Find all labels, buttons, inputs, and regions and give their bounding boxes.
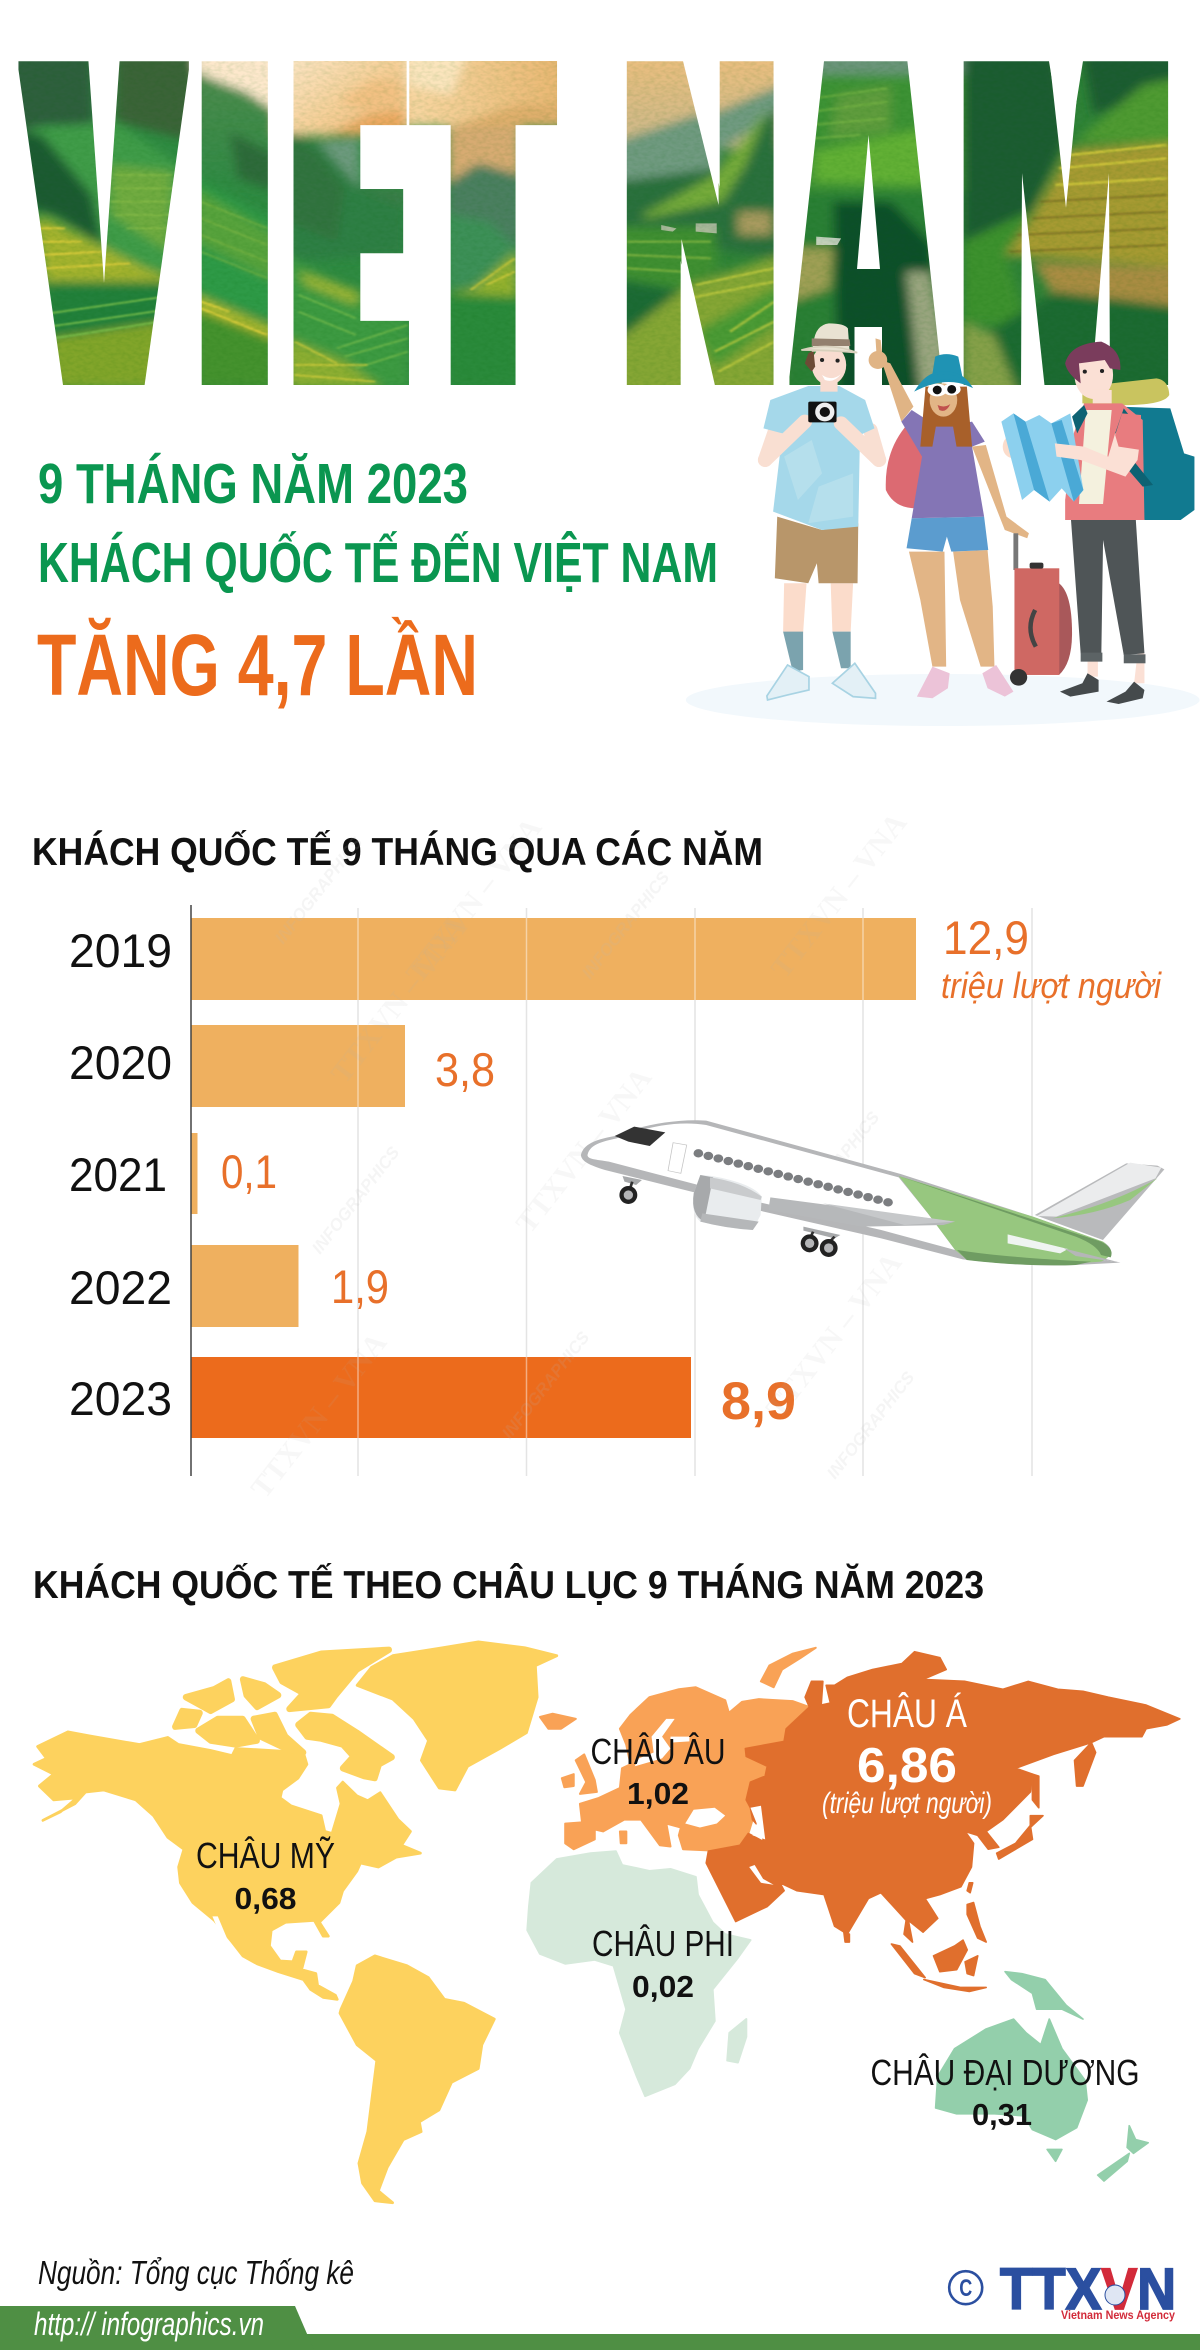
bar 2023 bbox=[69, 1357, 796, 1438]
section heading: visitors by year: KHÁCH QUỐC TẾ 9 THÁNG QUA CÁC NĂM bbox=[32, 829, 763, 874]
bar 2020: 3,8 bbox=[435, 1043, 495, 1096]
Europe bbox=[540, 1648, 816, 1850]
title: VIET NAM photo lettering bbox=[18, 61, 1168, 385]
bar 2019: triệu lượt người bbox=[941, 965, 1162, 1006]
tourist with sunglasses and suitcase bbox=[869, 338, 1072, 698]
bar 2023: 2023 bbox=[69, 1372, 172, 1425]
wordmark: TTXVN bbox=[1000, 2257, 1176, 2322]
copyright mark: C bbox=[959, 2275, 972, 2302]
label: Châu Mỹ bbox=[196, 1835, 335, 1916]
label: Châu Mỹ: CHÂU MỸ bbox=[196, 1835, 335, 1876]
label: Châu Phi: 0,02 bbox=[632, 1969, 694, 2004]
watermarks bbox=[245, 807, 919, 1504]
label: Châu Âu: CHÂU ÂU bbox=[590, 1731, 726, 1772]
watermarks: TTXVN – VNA bbox=[245, 1327, 394, 1504]
footer bar bbox=[0, 2306, 1200, 2350]
door bbox=[668, 1143, 687, 1173]
agency name: Vietnam News Agency bbox=[1061, 2308, 1175, 2322]
tourist with camera bbox=[763, 323, 879, 700]
bar 2019: 2019 bbox=[69, 924, 172, 977]
label: Châu Đại Dương: 0,31 bbox=[972, 2097, 1032, 2132]
watermarks: TTXVN – VNA bbox=[510, 1062, 659, 1239]
bar 2023: 8,9 bbox=[721, 1372, 796, 1431]
landing gear bbox=[619, 1176, 840, 1257]
bar 2019: 12,9 bbox=[943, 911, 1029, 964]
label: Châu Phi: CHÂU PHI bbox=[592, 1923, 734, 1964]
world map bbox=[34, 1642, 1180, 2203]
engine bbox=[693, 1175, 762, 1230]
label: Châu Mỹ: 0,68 bbox=[234, 1881, 296, 1916]
bar 2021: 0,1 bbox=[221, 1145, 277, 1198]
logo: TTXVN bbox=[949, 2257, 1176, 2322]
wing bbox=[768, 1197, 955, 1227]
bar 2022 bbox=[69, 1245, 389, 1327]
watermarks: INFOGRAPHICS bbox=[788, 1108, 884, 1222]
illustration: three tourists bbox=[686, 323, 1200, 726]
watermarks: INFOGRAPHICS bbox=[308, 1143, 404, 1257]
airplane illustration bbox=[581, 1120, 1164, 1265]
watermarks: TTXVN – VNA bbox=[765, 807, 914, 984]
watermarks: INFOGRAPHICS bbox=[578, 868, 674, 982]
watermarks: INFOGRAPHICS bbox=[498, 1328, 594, 1442]
landscape photo: left half bbox=[18, 61, 558, 385]
label: Châu Âu: 1,02 bbox=[627, 1776, 689, 1811]
headline line 1: 9 THÁNG NĂM 2023 bbox=[38, 452, 468, 516]
landscape photo: right half bbox=[626, 61, 1168, 385]
map: Africa, Europe, Asia, Oceania bbox=[527, 1648, 1180, 2181]
bar 2022: 2022 bbox=[69, 1261, 172, 1314]
label: Châu Á: 6,86 bbox=[857, 1739, 957, 1793]
watermarks: TTXVN – VNA bbox=[400, 812, 549, 989]
source note: Nguồn: Tổng cục Thống kê bbox=[38, 2254, 354, 2291]
tourist with map and backpack bbox=[1001, 342, 1194, 704]
label: Châu Á: (triệu lượt người) bbox=[822, 1787, 992, 1820]
ground shadow bbox=[686, 674, 1200, 726]
bar 2020: 2020 bbox=[69, 1036, 172, 1089]
headline line 2: KHÁCH QUỐC TẾ ĐẾN VIỆT NAM bbox=[38, 530, 718, 595]
watermarks: INFOGRAPHICS bbox=[823, 1368, 919, 1482]
Africa bbox=[527, 1851, 750, 2096]
tail fin bbox=[1035, 1163, 1164, 1240]
photo texture bbox=[41, 61, 1168, 385]
cabin windows bbox=[698, 1153, 888, 1202]
label: Châu Á bbox=[822, 1691, 992, 1820]
Oceania bbox=[936, 1972, 1148, 2181]
map: Americas bbox=[34, 1642, 557, 2203]
label: Châu Âu bbox=[590, 1731, 726, 1811]
label: Châu Á: CHÂU Á bbox=[847, 1691, 967, 1736]
bar chart: visitors by year bbox=[69, 905, 1162, 1476]
bar 2021 bbox=[69, 1133, 277, 1214]
bar 2019 bbox=[69, 911, 1162, 1006]
label: Châu Phi bbox=[592, 1923, 734, 2004]
watermarks: TTXVN – VNA bbox=[325, 912, 474, 1089]
headline line 3: TĂNG 4,7 LẦN bbox=[37, 617, 478, 714]
footer url: http:// infographics.vn bbox=[34, 2306, 264, 2342]
globe bbox=[1105, 2285, 1125, 2305]
copyright mark bbox=[949, 2271, 982, 2304]
section heading: visitors by continent: KHÁCH QUỐC TẾ THEO CHÂU LỤC 9 THÁNG NĂM 2023 bbox=[33, 1562, 984, 1607]
watermarks: INFOGRAPHICS bbox=[271, 833, 367, 947]
green tail livery bbox=[899, 1176, 1120, 1265]
label: Châu Đại Dương bbox=[870, 2052, 1140, 2132]
Asia bbox=[706, 1652, 1180, 1991]
watermarks: TTXVN – VNA bbox=[760, 1247, 909, 1424]
cockpit window bbox=[615, 1127, 665, 1146]
bar 2020 bbox=[69, 1025, 495, 1107]
headline bbox=[37, 452, 718, 714]
label: Châu Đại Dương: CHÂU ĐẠI DƯƠNG bbox=[870, 2052, 1140, 2093]
fuselage bbox=[581, 1120, 1120, 1265]
bar 2022: 1,9 bbox=[331, 1260, 389, 1313]
bar 2021: 2021 bbox=[69, 1148, 167, 1201]
